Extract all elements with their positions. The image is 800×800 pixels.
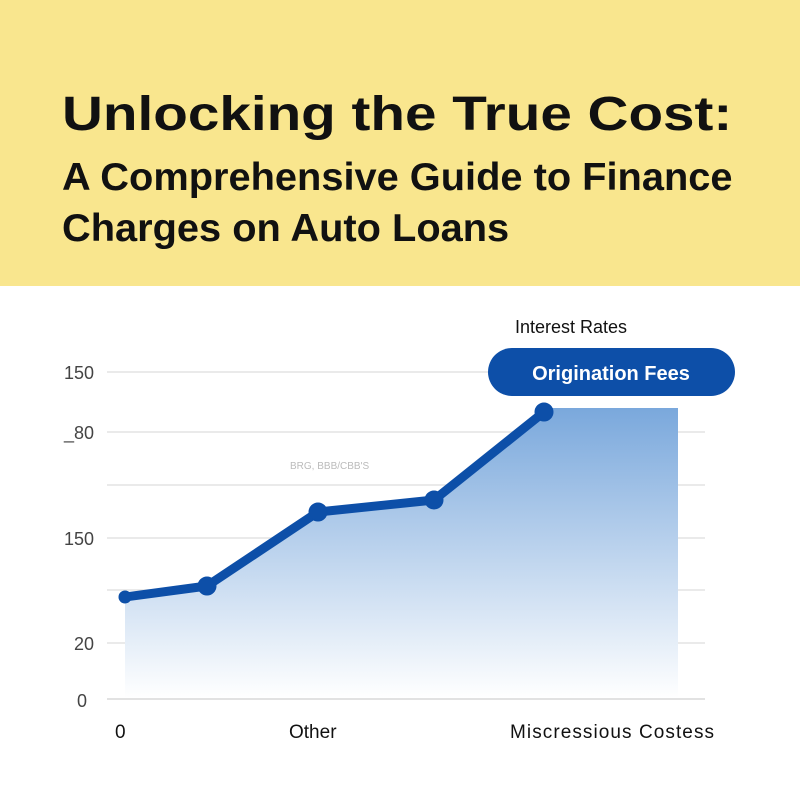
y axis labels: _80 bbox=[63, 423, 94, 444]
callout: origination fees: Origination Fees bbox=[532, 363, 690, 385]
subtitle: A Comprehensive Guide to Finance bbox=[62, 156, 733, 199]
y axis labels: 0 bbox=[77, 691, 87, 711]
data line bbox=[119, 403, 553, 603]
callout: origination fees bbox=[488, 348, 735, 396]
header band bbox=[0, 0, 800, 286]
y axis labels: 150 bbox=[64, 529, 94, 549]
line chart bbox=[63, 317, 735, 743]
x axis labels: 0 bbox=[115, 722, 126, 743]
y axis labels bbox=[63, 363, 94, 711]
y axis labels: 150 bbox=[64, 363, 94, 383]
title: Unlocking the True Cost: bbox=[62, 88, 732, 141]
x axis labels: Miscressious Costess bbox=[510, 722, 714, 743]
x axis labels: Other bbox=[289, 722, 337, 743]
area fill bbox=[125, 408, 678, 698]
x axis labels bbox=[115, 722, 714, 743]
y axis labels: 20 bbox=[74, 634, 94, 654]
faint label: BRG, BBB/CBB'S bbox=[290, 461, 369, 472]
subtitle bbox=[62, 156, 733, 250]
subtitle: Charges on Auto Loans bbox=[62, 207, 509, 250]
legend: interest rates: Interest Rates bbox=[515, 317, 627, 337]
